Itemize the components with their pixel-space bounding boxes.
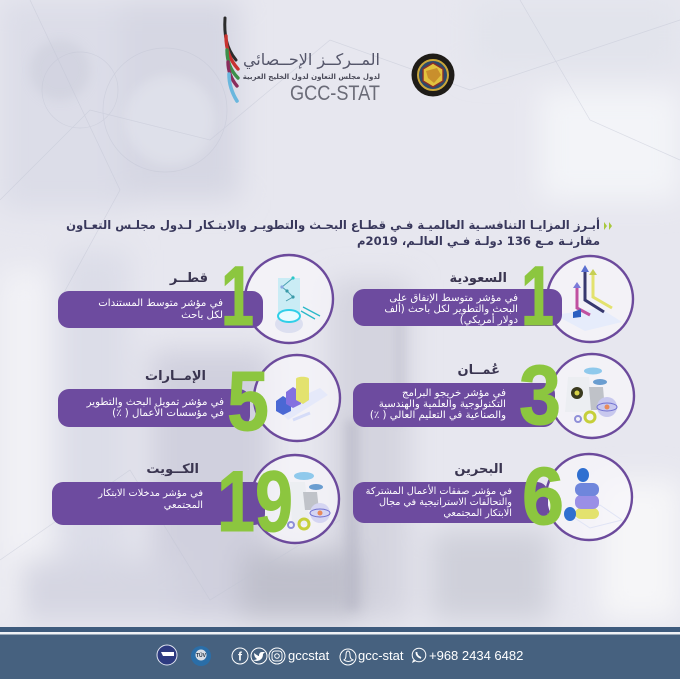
panel: Bahrain: في مؤشر صفقات الأعمال المشتركة [366, 484, 512, 497]
logo: organisation name: GCC-STAT [290, 82, 380, 105]
icon: instagram [269, 648, 285, 664]
icon: facebook [232, 648, 248, 664]
panel: Oman: عُمــان [458, 362, 500, 378]
panel: Saudi Arabia: دولار أمريكي) [460, 313, 518, 326]
icon: rising arrows chart [555, 265, 622, 331]
panel: Kuwait [52, 454, 339, 550]
logo: organisation name: لدول مجلس التعاون لدول الخليج العربية [243, 73, 380, 81]
icon: plant with atom and gears [288, 472, 330, 529]
logo: GCC-STAT ribbon [225, 18, 238, 101]
panel: Qatar: لكل باحث [181, 310, 223, 321]
icon: snapchat [340, 649, 356, 665]
panel: Bahrain [353, 451, 632, 542]
panel: Oman: والصناعية في التعليم العالي ( ٪) [370, 410, 506, 421]
logo: organisation name: المــركــز الإحــصائي [243, 50, 380, 70]
logo: organisation name [243, 50, 380, 105]
panel: Kuwait: الكــويت [146, 462, 199, 477]
panel: Bahrain: الابتكار المجتمعي [443, 508, 512, 519]
panel: Kuwait: المجتمعي [164, 500, 203, 511]
icon: stacked discs [564, 468, 622, 528]
panel: Oman: التكنولوجية والعلمية والهندسية [379, 399, 506, 410]
panel: UAE: في مؤشر تمويل البحث والتطوير [86, 397, 224, 408]
text: gcc-stat handle: gcc-stat [358, 648, 404, 663]
icon: TUV badge [191, 646, 211, 666]
text: gccstat handle: gccstat [288, 648, 330, 663]
icon: GCC emblem [412, 54, 454, 96]
panel: Qatar: 1 [221, 249, 254, 343]
icon: whatsapp [412, 648, 426, 663]
panel: Saudi Arabia [353, 249, 633, 343]
panel: Qatar: في مؤشر متوسط المستندات [98, 298, 223, 309]
panel: Oman [353, 348, 634, 442]
panel: Oman: في مؤشر خريجو البرامج [402, 388, 506, 399]
panel: Oman: 3 [519, 348, 561, 442]
heading [66, 217, 612, 249]
panel: UAE: الإمــارات [145, 369, 206, 384]
icon: network cylinder [275, 276, 320, 333]
panel: Bahrain: البحرين [454, 462, 503, 477]
panel: Saudi Arabia: السعودية [450, 271, 507, 286]
panel: Qatar: قطــر [169, 271, 208, 286]
heading: أبـرز المزايـا التنافسـية العالميـة فـي قطـاع البحـث والتطويـر والابتـكار لـدول مجلـس التعـاون [66, 217, 600, 233]
panel: UAE: في مؤسسات الأعمال ( ٪) [112, 406, 224, 419]
heading: مقارنـة مـع 136 دولـة فـي العالـم، 2019م [357, 234, 600, 249]
panel: Kuwait: في مؤشر مدخلات الابتكار [97, 488, 203, 499]
panel: Kuwait: 19 [217, 454, 293, 550]
panel: Saudi Arabia: البحث والتطوير لكل باحث (ألف [384, 302, 518, 315]
panel: Saudi Arabia: في مؤشر متوسط الإنفاق على [389, 293, 518, 304]
icon: 3D bar chart [276, 377, 328, 420]
icon: nuclear plant with atom and gears [565, 368, 617, 422]
text: phone number: +968 2434 6482 [429, 648, 523, 663]
icon: TUV badge: TÜV [196, 652, 207, 659]
panel: UAE [58, 354, 340, 448]
panel: Bahrain: 6 [522, 451, 564, 542]
icon: twitter [251, 648, 267, 664]
footer bar [0, 627, 680, 679]
panel: Saudi Arabia: 1 [521, 249, 554, 343]
icon: certification badge [157, 645, 177, 665]
panel: Bahrain: والتحالفات الاستراتيجية في مجال [379, 497, 512, 508]
icon: facebook: f [238, 650, 243, 664]
panel: Qatar [58, 249, 333, 343]
panel: UAE: 5 [227, 354, 269, 448]
